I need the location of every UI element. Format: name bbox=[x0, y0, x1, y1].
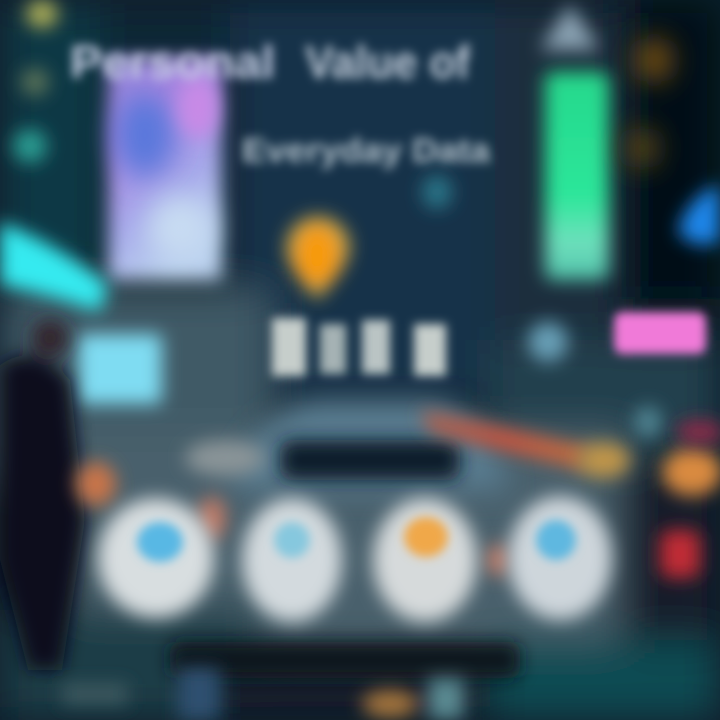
lower dark band bbox=[170, 642, 520, 678]
panel: circle 4 bbox=[508, 496, 612, 620]
light cyan sign bbox=[78, 334, 162, 404]
blue neon blob bbox=[678, 184, 720, 244]
icon: blue badge 3 bbox=[536, 520, 576, 560]
cyan neon streak bbox=[0, 222, 108, 312]
right side orange lights bbox=[626, 38, 672, 168]
panel: circle 3 bbox=[373, 498, 477, 622]
left warm lights bbox=[76, 440, 510, 576]
car windshield bbox=[280, 440, 460, 480]
car body bbox=[230, 400, 510, 490]
panel: purple poster bbox=[108, 58, 222, 280]
pale blue sign bbox=[528, 322, 568, 362]
title: Personal bbox=[70, 36, 275, 88]
icon: orange badge bbox=[404, 517, 448, 557]
panel: green bar bbox=[540, 4, 609, 280]
icon: orange location pin bbox=[286, 216, 350, 300]
title bbox=[70, 36, 471, 88]
title: Value of bbox=[305, 36, 471, 88]
icon: blue badge 2 bbox=[274, 522, 310, 558]
panel: circle 1 bbox=[98, 498, 214, 618]
small teal marker bbox=[422, 175, 452, 209]
pink neon sign bbox=[614, 312, 706, 354]
red-orange light streak bbox=[420, 406, 720, 578]
person silhouette bbox=[0, 320, 85, 670]
panel: circle 2 bbox=[242, 498, 342, 622]
icon: blue badge 1 bbox=[137, 522, 183, 562]
subtitle text row: Everyday Data bbox=[242, 132, 491, 170]
white data blocks bbox=[272, 318, 446, 376]
top-left small lights bbox=[13, 0, 58, 163]
bottom road details bbox=[62, 668, 464, 720]
